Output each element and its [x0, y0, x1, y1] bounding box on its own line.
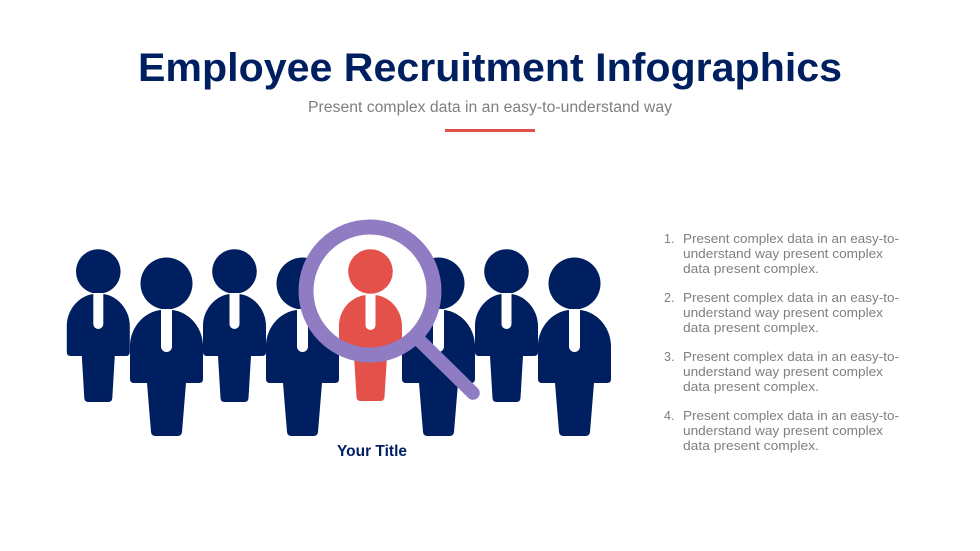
list item 1: Present complex data in an easy-to-: [683, 232, 899, 246]
illustration caption: Your Title: [337, 443, 407, 460]
list item 3: Present complex data in an easy-to-: [683, 350, 899, 364]
list item 3: data present complex.: [683, 380, 819, 394]
person 6 large navy: [402, 258, 475, 436]
person 4 large navy: [266, 258, 339, 436]
list item 1: understand way present complex: [683, 247, 884, 261]
list item 4: Present complex data in an easy-to-: [683, 409, 899, 423]
person 7 small navy: [475, 249, 538, 402]
list item 4: 4.: [664, 409, 674, 423]
person 1 small navy: [67, 249, 130, 402]
list item 2: data present complex.: [683, 321, 819, 335]
red accent line: [445, 129, 535, 132]
icon: magnifying glass: [306, 227, 473, 393]
numbered list: [664, 232, 899, 453]
subtitle: Present complex data in an easy-to-understand way: [308, 99, 672, 116]
list item 3: understand way present complex: [683, 365, 884, 379]
magnifier lens interior: [306, 227, 434, 355]
list item 2: Present complex data in an easy-to-: [683, 291, 899, 305]
list item 1: data present complex.: [683, 262, 819, 276]
list item 3: [664, 350, 899, 394]
list item 1: [664, 232, 899, 276]
list item 2: understand way present complex: [683, 306, 884, 320]
person 8 large navy: [538, 258, 611, 436]
person 3 small navy: [203, 249, 266, 402]
list item 2: [664, 291, 899, 335]
person 2 large navy: [130, 258, 203, 436]
list item 3: 3.: [664, 350, 674, 364]
list item 2: 2.: [664, 291, 674, 305]
illustration: row of employees with magnifier: [67, 227, 611, 436]
list item 4: [664, 409, 899, 453]
title: Employee Recruitment Infographics: [138, 46, 842, 90]
list item 4: data present complex.: [683, 439, 819, 453]
list item 4: understand way present complex: [683, 424, 884, 438]
selected candidate in red: [339, 249, 402, 401]
list item 1: 1.: [664, 232, 674, 246]
